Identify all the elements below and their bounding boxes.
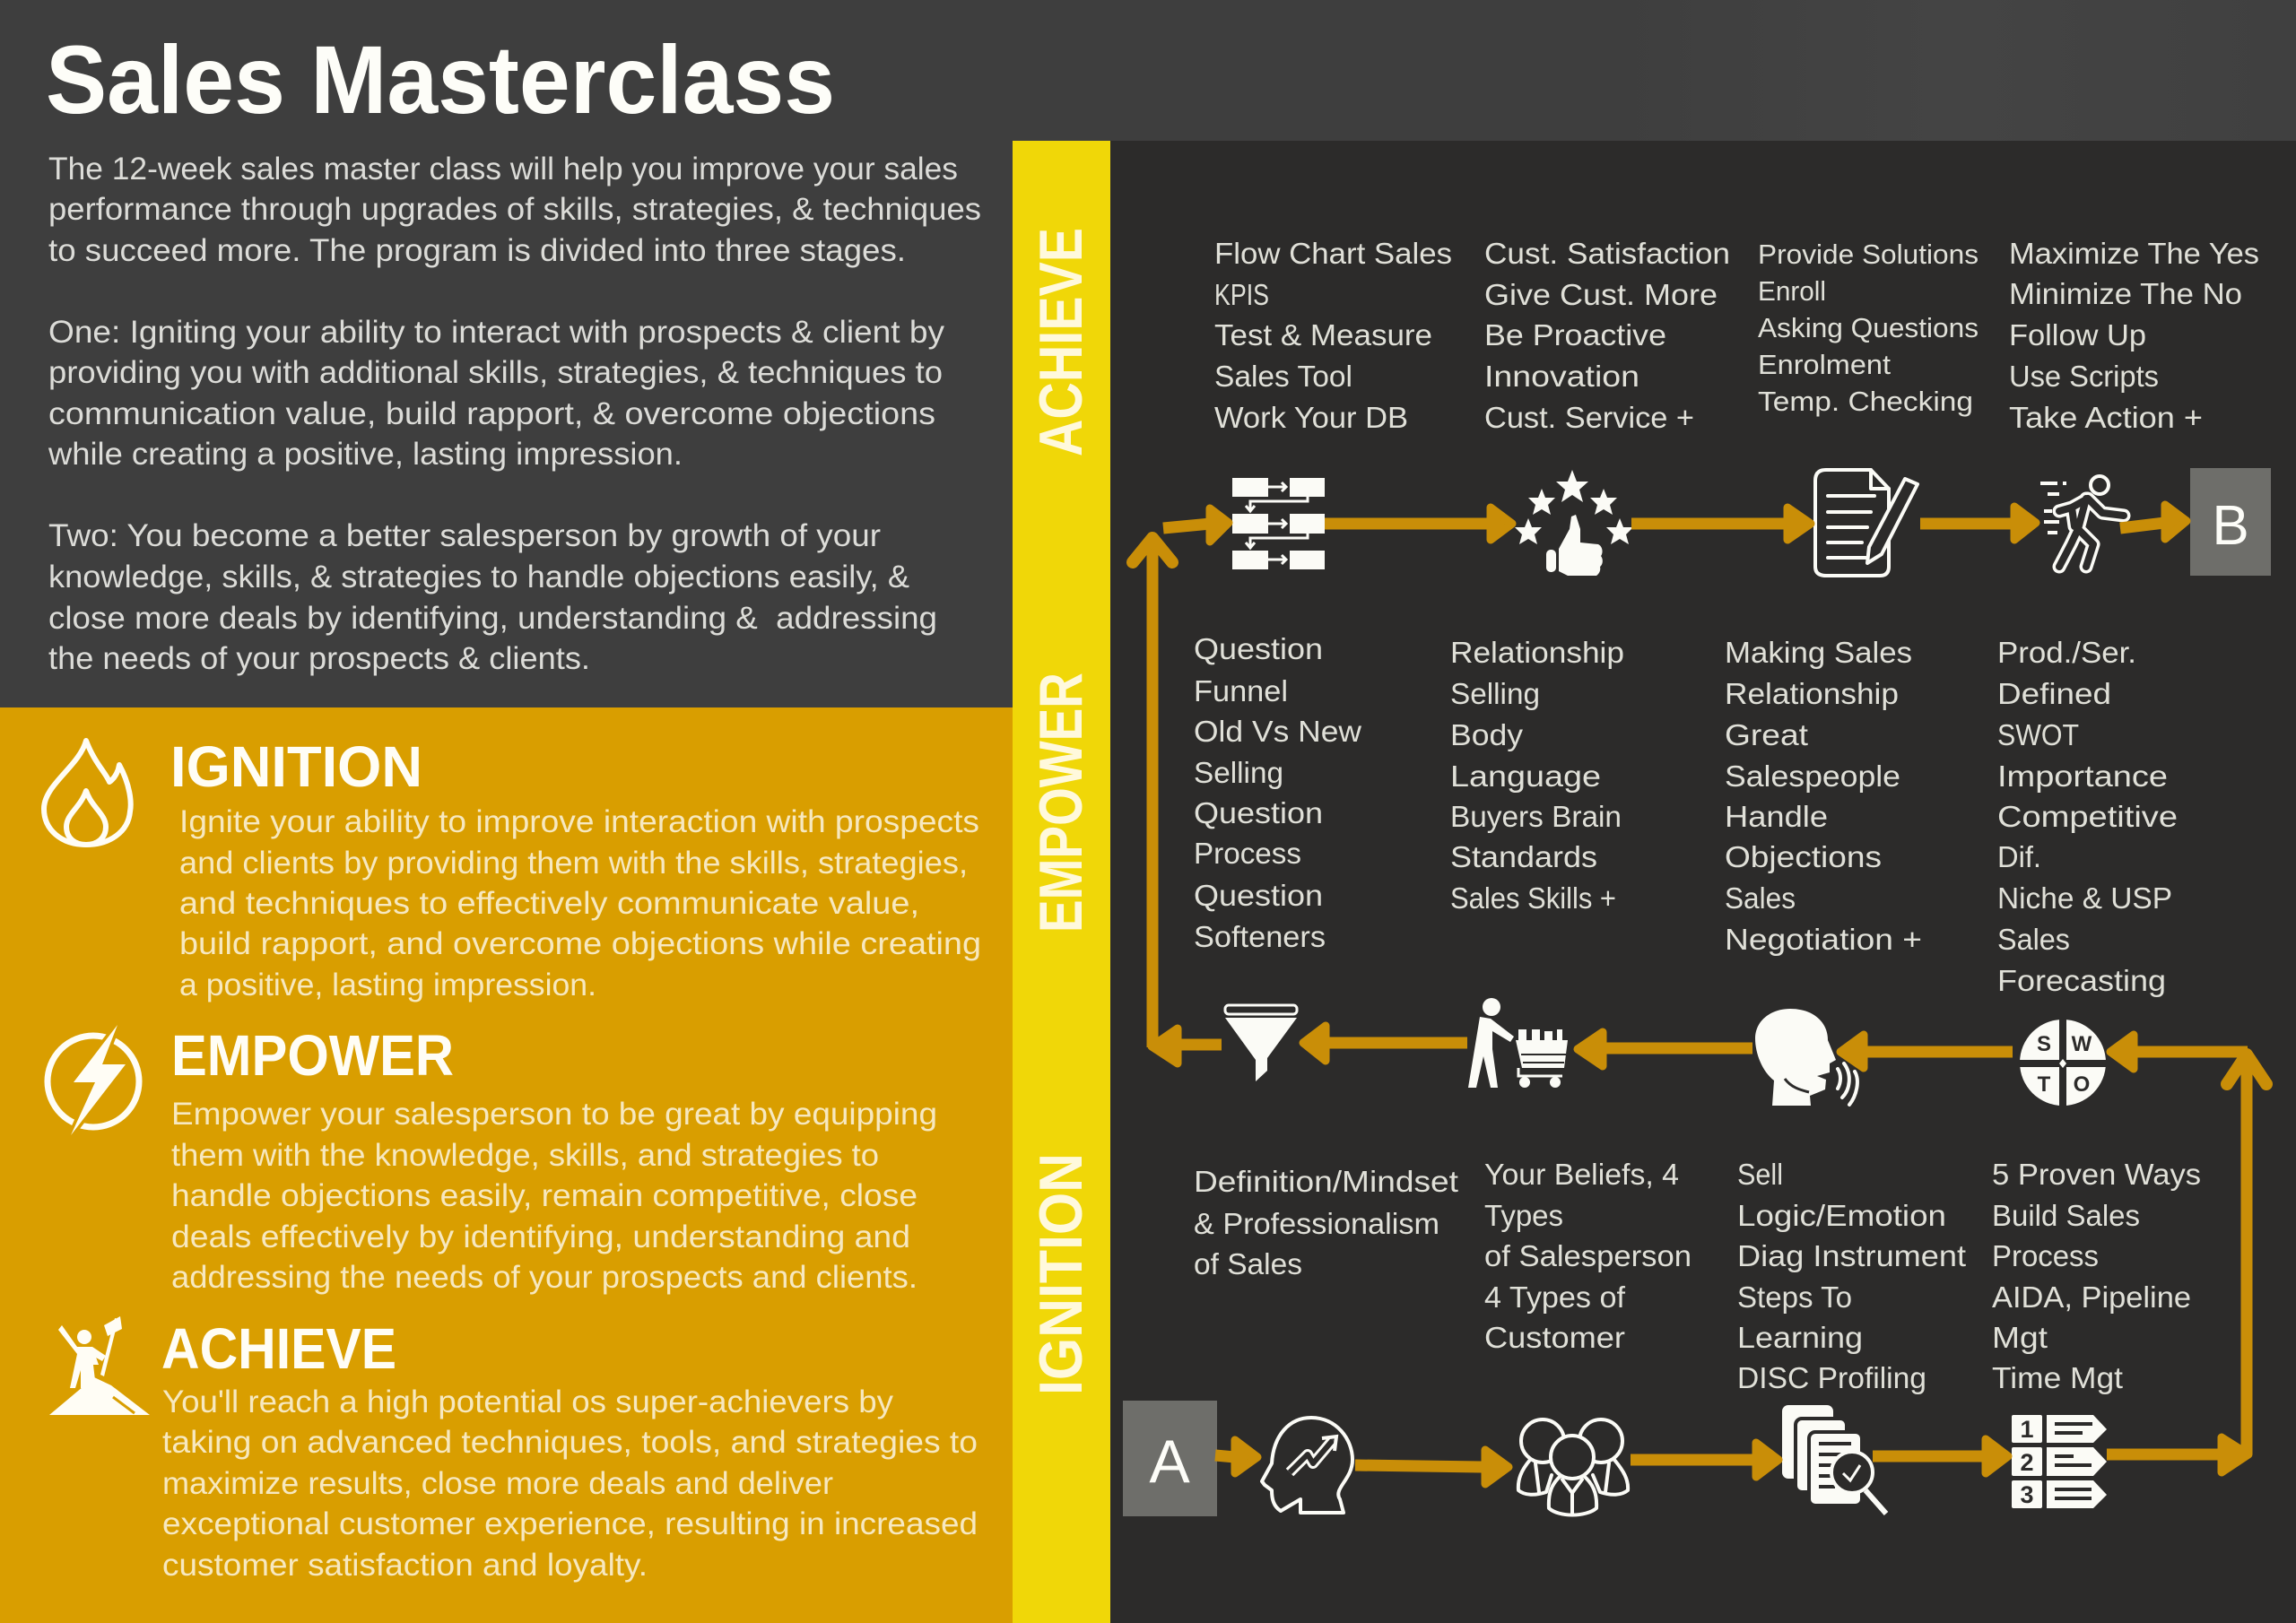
empower topic list 4: Niche & USP [1997,881,2172,915]
icon: numbered list: 1 [2020,1416,2034,1443]
icon: lightning bolt [48,1025,139,1135]
empower topic list 2: Buyers Brain [1450,800,1622,833]
vertical label: achieve: ACHIEVE [1027,228,1095,456]
achieve topic list 3: Provide Solutions [1758,239,1979,270]
ignition topic list 3: Steps To [1737,1280,1852,1314]
achieve topic list 1: Sales Tool [1214,360,1352,393]
achieve topic list 2: Be Proactive [1484,318,1666,352]
icon: SWOT circle: W [2072,1032,2092,1056]
achieve topic list 3: Asking Questions [1758,312,1979,343]
text block: program introduction: the needs of your prospects & clients. [48,641,590,676]
text block: program introduction: close more deals by identifying, understanding & addressing [48,601,937,636]
ignition topic list 3 [1737,1158,1966,1394]
achieve topic list 2: Give Cust. More [1484,278,1718,311]
empower topic list 4: SWOT [1997,718,2079,751]
text block: program introduction: while creating a positive, lasting impression. [48,437,683,472]
empower topic list 1: Question [1194,879,1323,912]
empower topic list 1: Question [1194,632,1323,665]
text block: program introduction: Two: You become a better salesperson by growth of your [48,518,881,553]
arrow: document to runner [1920,507,2036,540]
ignition topic list 3: Learning [1737,1321,1863,1354]
empower topic list 2: Sales Skills + [1450,881,1616,915]
arrow: team to documents [1631,1443,1779,1477]
text block: achieve description: maximize results, close more deals and deliver [162,1466,833,1501]
text block: ignition description: and techniques to effectively communicate value, [179,886,919,921]
arrow: documents to list [1873,1439,2008,1473]
arrow: into flow chart [1163,508,1229,542]
text block: program introduction: providing you with additional skills, strategies, & techniques to [48,355,943,390]
ignition topic list 1: of Sales [1194,1247,1302,1280]
text block: empower description [171,1097,937,1295]
text block: achieve description: taking on advanced techniques, tools, and strategies to [162,1425,978,1460]
arrow: funnel to left rail [1152,1028,1222,1063]
arrow: list to right rail [2107,1437,2248,1472]
empower topic list 2: Body [1450,718,1524,751]
title: Sales Masterclass [46,25,835,134]
empower topic list 4: Prod./Ser. [1997,636,2136,669]
ignition topic list 2 [1484,1158,1692,1354]
empower topic list 1: Funnel [1194,674,1288,707]
ignition topic list 2: Types [1484,1199,1563,1232]
achieve topic list 2 [1484,237,1730,434]
text block: empower description: Empower your salesperson to be great by equipping [171,1097,937,1132]
ignition topic list 1: & Professionalism [1194,1207,1439,1240]
arrow: up the right side [2227,1055,2266,1454]
icon: SWOT circle: O [2074,1072,2090,1097]
achieve topic list 4: Take Action + [2009,401,2203,434]
text block: achieve description: customer satisfaction and loyalty. [162,1548,648,1583]
icon: head with growth chart [1262,1418,1352,1513]
empower topic list 1: Question [1194,796,1323,829]
icon: document and pen [1815,470,1918,576]
empower topic list 3: Great [1725,718,1808,751]
empower topic list 4: Forecasting [1997,964,2166,997]
achieve topic list 3: Enroll [1758,275,1826,307]
empower topic list 1: Process [1194,837,1301,870]
icon: team of three [1518,1419,1628,1515]
vertical label: empower: EMPOWER [1027,673,1095,933]
icon: funnel [1225,1005,1297,1081]
ignition topic list 3: DISC Profiling [1737,1361,1926,1394]
panel: yellow stage band [1013,141,1110,1623]
achieve topic list 4: Maximize The Yes [2009,237,2259,270]
heading: empower: EMPOWER [171,1023,454,1088]
empower topic list 4: Competitive [1997,800,2178,833]
empower topic list 1 [1194,632,1361,953]
empower topic list 2: Selling [1450,677,1540,710]
ignition topic list 4: AIDA, Pipeline [1992,1280,2191,1314]
text block: ignition description: Ignite your ability to improve interaction with prospects [179,804,979,839]
icon: documents with magnifier [1782,1405,1886,1514]
empower topic list 3: Handle [1725,800,1828,833]
box: end point B: B [2212,495,2249,557]
achieve topic list 2: Innovation [1484,360,1639,393]
empower topic list 4: Importance [1997,759,2168,793]
arrow: A to head [1215,1440,1257,1473]
icon: flow chart [1232,478,1325,569]
empower topic list 4: Sales [1997,923,2070,956]
ignition topic list 4: 5 Proven Ways [1992,1158,2201,1191]
empower topic list 1: Softeners [1194,920,1326,953]
empower topic list 2: Language [1450,759,1601,793]
achieve topic list 2: Cust. Service + [1484,401,1694,434]
ignition topic list 2: 4 Types of [1484,1280,1626,1314]
achieve topic list 3: Temp. Checking [1758,386,1973,417]
box: end point B [2190,468,2271,576]
ignition topic list 4: Time Mgt [1992,1361,2123,1394]
ignition topic list 4: Build Sales [1992,1199,2140,1232]
panel: dark roadmap [1110,141,2296,1623]
icon: numbered list: 2 [2020,1449,2034,1476]
icon: SWOT circle [2019,1019,2107,1107]
achieve topic list 2: Cust. Satisfaction [1484,237,1730,270]
achieve topic list 4: Follow Up [2009,318,2146,352]
text block: program introduction [48,152,981,676]
achieve topic list 4 [2009,237,2259,434]
achieve topic list 4: Use Scripts [2009,360,2159,393]
achieve topic list 3: Enrolment [1758,349,1891,380]
heading: achieve: ACHIEVE [161,1316,396,1381]
ignition topic list 3: Sell [1737,1158,1783,1191]
text block: achieve description [162,1384,978,1583]
icon: stars and thumbs up [1515,470,1633,576]
achieve topic list 1 [1214,237,1452,434]
empower topic list 2: Standards [1450,840,1597,873]
achieve topic list 3 [1758,239,1979,417]
empower topic list 4: Dif. [1997,840,2041,873]
icon: climber with flag [49,1316,150,1415]
arrow: corner to SWOT [2110,1035,2248,1069]
text block: empower description: them with the knowledge, skills, and strategies to [171,1138,879,1173]
text block: program introduction: The 12-week sales master class will help you improve your sales [48,152,958,187]
panel: ignition empower achieve summary [0,707,1013,1623]
arrow: head to shopper [1578,1032,1752,1066]
empower topic list 3: Making Sales [1725,636,1912,669]
box: start point A [1123,1401,1217,1516]
achieve topic list 1: KPIS [1214,278,1269,311]
empower topic list 3: Salespeople [1725,759,1900,793]
empower topic list 1: Selling [1194,756,1283,789]
arrow: shopper to funnel [1303,1026,1467,1061]
ignition topic list 4: Mgt [1992,1321,2048,1354]
text block: program introduction: performance through upgrades of skills, strategies, & techniques [48,192,981,227]
empower topic list 3: Relationship [1725,677,1899,710]
arrow: flow chart to stars [1325,508,1512,540]
text block: ignition description: a positive, lasting impression. [179,968,596,1002]
icon: SWOT circle: T [2038,1072,2051,1097]
icon: SWOT circle: S [2037,1032,2051,1056]
achieve topic list 1: Test & Measure [1214,318,1432,352]
text block: ignition description: and clients by providing them with the skills, strategies, [179,846,968,881]
ignition topic list 4: Process [1992,1239,2099,1272]
empower topic list 1: Old Vs New [1194,715,1361,748]
achieve topic list 1: Work Your DB [1214,401,1408,434]
text block: ignition description: build rapport, and overcome objections while creating [179,926,981,961]
heading: ignition: IGNITION [170,734,422,799]
empower topic list 4: Defined [1997,677,2111,710]
empower topic list 3 [1725,636,1922,956]
icon: speaking head [1755,1009,1857,1106]
empower topic list 3: Sales [1725,881,1796,915]
ignition topic list 3: Diag Instrument [1737,1239,1966,1272]
text block: empower description: deals effectively by identifying, understanding and [171,1219,910,1254]
empower topic list 3: Negotiation + [1725,923,1922,956]
arrow: runner to B [2120,505,2187,539]
text block: empower description: handle objections easily, remain competitive, close [171,1178,918,1213]
box: start point A: A [1149,1428,1190,1496]
icon: shopper with cart [1468,998,1568,1088]
text block: program introduction: communication value, build rapport, & overcome objections [48,396,935,431]
arrow: SWOT to head [1840,1035,2013,1068]
icon: numbered list [2012,1415,2107,1508]
ignition topic list 1 [1194,1165,1458,1280]
text block: program introduction: to succeed more. The program is divided into three stages. [48,233,906,268]
ignition topic list 1: Definition/Mindset [1194,1165,1458,1198]
text block: achieve description: exceptional customer experience, resulting in increased [162,1506,978,1541]
empower topic list 2: Relationship [1450,636,1624,669]
ignition topic list 2: of Salesperson [1484,1239,1692,1272]
vertical label: ignition: IGNITION [1027,1153,1095,1395]
achieve topic list 1: Flow Chart Sales [1214,237,1452,270]
empower topic list 2 [1450,636,1624,915]
ignition topic list 4 [1992,1158,2201,1394]
icon: numbered list: 3 [2020,1481,2034,1508]
arrow: stars to document [1631,508,1811,540]
text block: ignition description [179,804,981,1002]
arrow: head to team [1355,1450,1509,1484]
icon: running person [2040,476,2124,567]
empower topic list 3: Objections [1725,840,1882,873]
empower topic list 4 [1997,636,2178,997]
ignition topic list 2: Your Beliefs, 4 [1484,1158,1679,1191]
icon: flame [44,741,131,845]
text block: empower description: addressing the needs of your prospects and clients. [171,1260,918,1295]
text block: program introduction: knowledge, skills, & strategies to handle objections easily, & [48,560,909,595]
achieve topic list 4: Minimize The No [2009,277,2242,310]
text block: program introduction: One: Igniting your ability to interact with prospects & client by [48,315,945,350]
ignition topic list 3: Logic/Emotion [1737,1199,1946,1232]
ignition topic list 2: Customer [1484,1321,1625,1354]
text block: achieve description: You'll reach a high potential os super-achievers by [162,1384,894,1419]
arrow: up the left side [1133,538,1172,1047]
